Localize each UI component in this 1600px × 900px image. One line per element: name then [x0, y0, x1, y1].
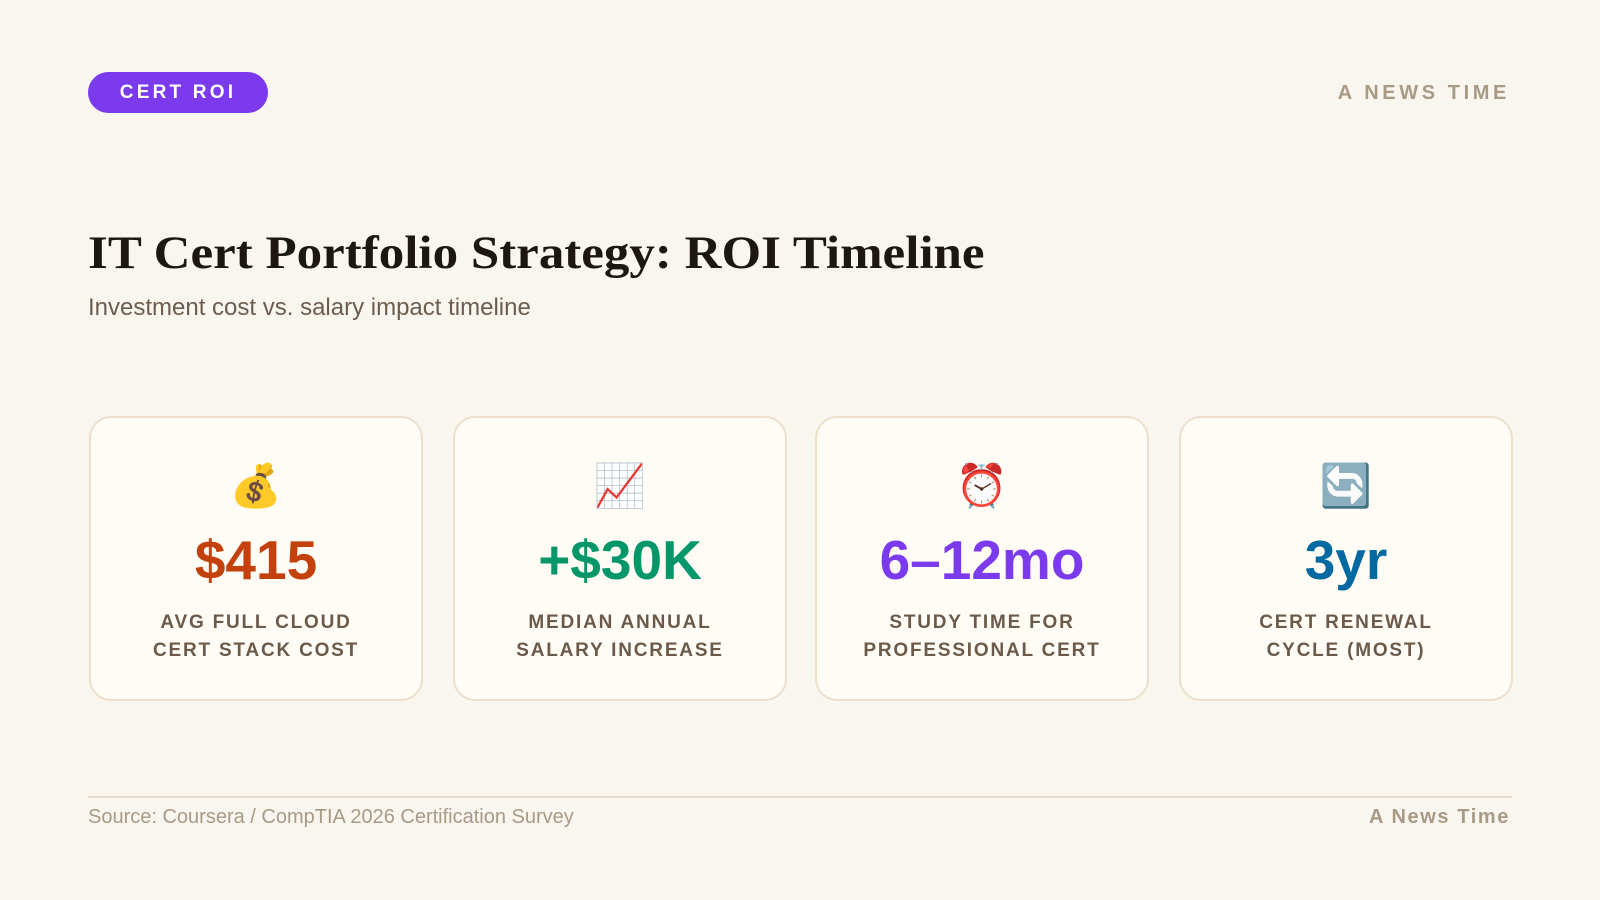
icon: chart: 📈	[594, 462, 646, 511]
label: salary	[516, 612, 724, 661]
label: cost: CERT STACK COST	[153, 640, 359, 661]
icon: money bag: 💰	[230, 462, 282, 511]
label: cost	[153, 612, 359, 661]
tag pill: CERT ROI	[120, 82, 236, 103]
title: IT Cert Portfolio Strategy: ROI Timeline	[88, 227, 985, 279]
icon: alarm clock: ⏰	[956, 462, 1008, 511]
label: study time	[863, 612, 1101, 661]
label: study time: STUDY TIME FOR	[889, 612, 1075, 633]
panel: renewal	[1179, 416, 1513, 701]
panel: cost	[89, 416, 423, 701]
value: study time: 6–12mo	[880, 529, 1084, 591]
label: renewal: CYCLE (MOST)	[1267, 640, 1425, 661]
label: renewal	[1259, 612, 1433, 661]
tag pill	[88, 72, 268, 113]
panel: salary	[453, 416, 787, 701]
label: study time: PROFESSIONAL CERT	[863, 640, 1101, 661]
value: cost: $415	[195, 529, 317, 591]
label: renewal: CERT RENEWAL	[1259, 612, 1433, 633]
label: salary: SALARY INCREASE	[516, 640, 724, 661]
value: renewal: 3yr	[1305, 529, 1387, 591]
panel: study time	[815, 416, 1149, 701]
label: salary: MEDIAN ANNUAL	[528, 612, 712, 633]
brand: A NEWS TIME	[1338, 82, 1510, 104]
icon: renewal arrows: 🔄	[1320, 462, 1372, 511]
value: salary: +$30K	[538, 529, 702, 591]
footer brand: A News Time	[1369, 806, 1510, 828]
subtitle: Investment cost vs. salary impact timeline	[88, 294, 531, 321]
source: Source: Coursera / CompTIA 2026 Certification Survey	[88, 806, 574, 828]
label: cost: AVG FULL CLOUD	[160, 612, 352, 633]
